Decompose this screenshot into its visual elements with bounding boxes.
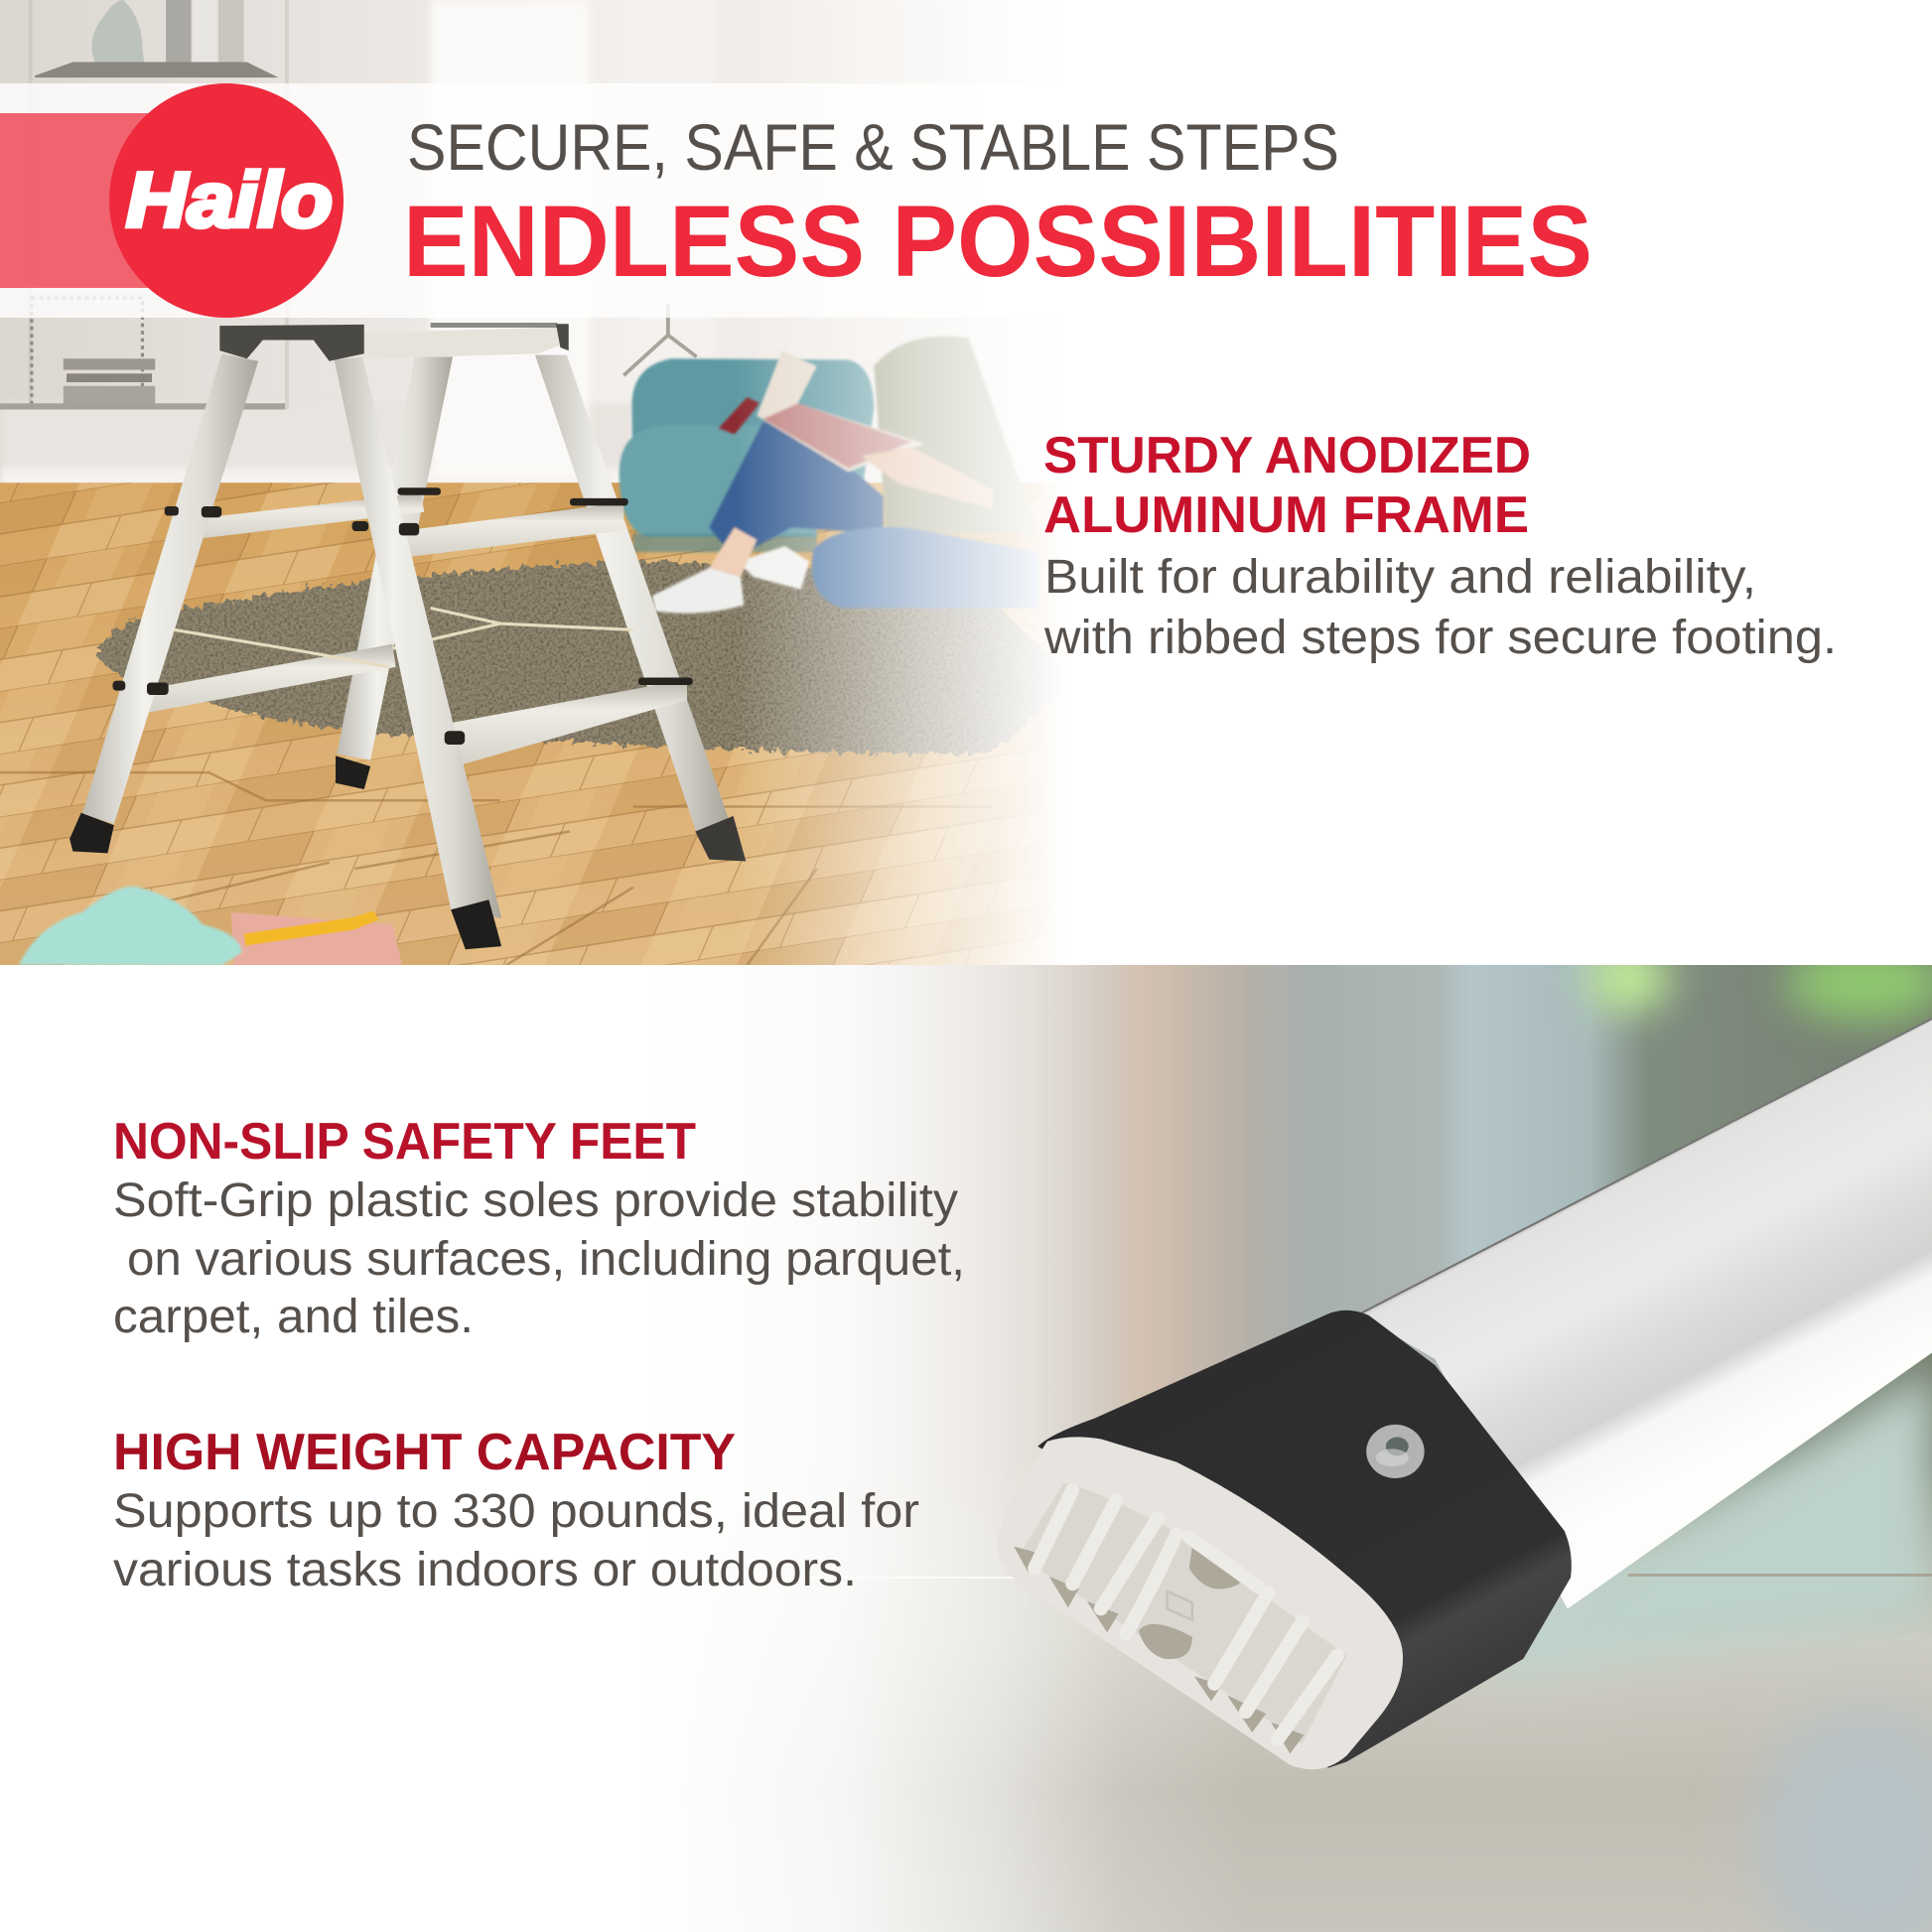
ladder back leg <box>337 356 453 760</box>
screw <box>1366 1425 1425 1478</box>
step ladder <box>69 323 746 949</box>
room backdrop <box>0 0 935 483</box>
text block: sturdy anodized aluminum frame: Built for durability and reliability, <box>1044 551 1756 604</box>
text block: non-slip safety feet: on various surfaces, including parquet, <box>127 1233 965 1286</box>
front lower step <box>451 679 687 766</box>
header translucent band <box>0 83 1932 318</box>
text block: sturdy anodized aluminum frame: STURDY ANODIZED <box>1043 427 1531 484</box>
title: ENDLESS POSSIBILITIES <box>403 185 1592 298</box>
photo: room with step ladder <box>0 0 1048 965</box>
top platform <box>379 328 560 357</box>
text block: sturdy anodized aluminum frame: ALUMINUM FRAME <box>1043 486 1529 544</box>
sofa <box>620 358 874 552</box>
rope <box>174 608 633 667</box>
text block: sturdy anodized aluminum frame <box>1043 427 1837 664</box>
aluminum tube <box>1359 1019 1932 1608</box>
text block: non-slip safety feet: NON-SLIP SAFETY FEET <box>113 1113 696 1171</box>
rear lower step <box>149 644 396 713</box>
title: SECURE, SAFE & STABLE STEPS <box>407 110 1339 184</box>
ladder left leg <box>82 353 258 824</box>
ladder right leg <box>535 355 728 833</box>
logo: Hailo: Hailo <box>126 156 333 243</box>
woman reading magazine <box>652 337 1038 614</box>
sole tread pockets <box>1014 1547 1304 1753</box>
rear upper step <box>200 493 424 538</box>
logo: Hailo <box>109 83 344 318</box>
text block: non-slip safety feet: Soft-Grip plastic soles provide stability <box>113 1174 958 1227</box>
green foliage highlights <box>1587 944 1932 1021</box>
text block: high weight capacity: Supports up to 330 pounds, ideal for <box>113 1485 919 1538</box>
grey non-slip sole <box>997 1437 1403 1769</box>
floor items: duster, cloth and brush <box>19 887 402 965</box>
panel: blurred lower background <box>794 965 1932 1932</box>
wooden parquet floor <box>0 483 1076 965</box>
text block: high weight capacity: HIGH WEIGHT CAPACITY <box>113 1424 736 1481</box>
knobs <box>113 487 693 745</box>
text block: high weight capacity <box>113 1424 919 1596</box>
text block: sturdy anodized aluminum frame: with ribbed steps for secure footing. <box>1043 612 1837 664</box>
ladder foot close-up <box>997 1019 1932 1769</box>
title <box>403 110 1592 298</box>
sole tread ribs <box>1035 1490 1337 1740</box>
front upper step <box>405 502 623 557</box>
sole tread recess <box>1019 1483 1347 1743</box>
text block: high weight capacity: various tasks indoors or outdoors. <box>113 1544 857 1596</box>
ladder center leg <box>335 356 501 918</box>
text block: non-slip safety feet <box>113 1113 965 1343</box>
ladder feet <box>69 756 746 949</box>
right white fade <box>735 0 1072 965</box>
top black bracket <box>219 325 364 361</box>
shag rug <box>95 562 1076 754</box>
text block: non-slip safety feet: carpet, and tiles. <box>113 1291 474 1343</box>
pink strip <box>0 113 149 288</box>
black end cap <box>1037 1311 1572 1768</box>
